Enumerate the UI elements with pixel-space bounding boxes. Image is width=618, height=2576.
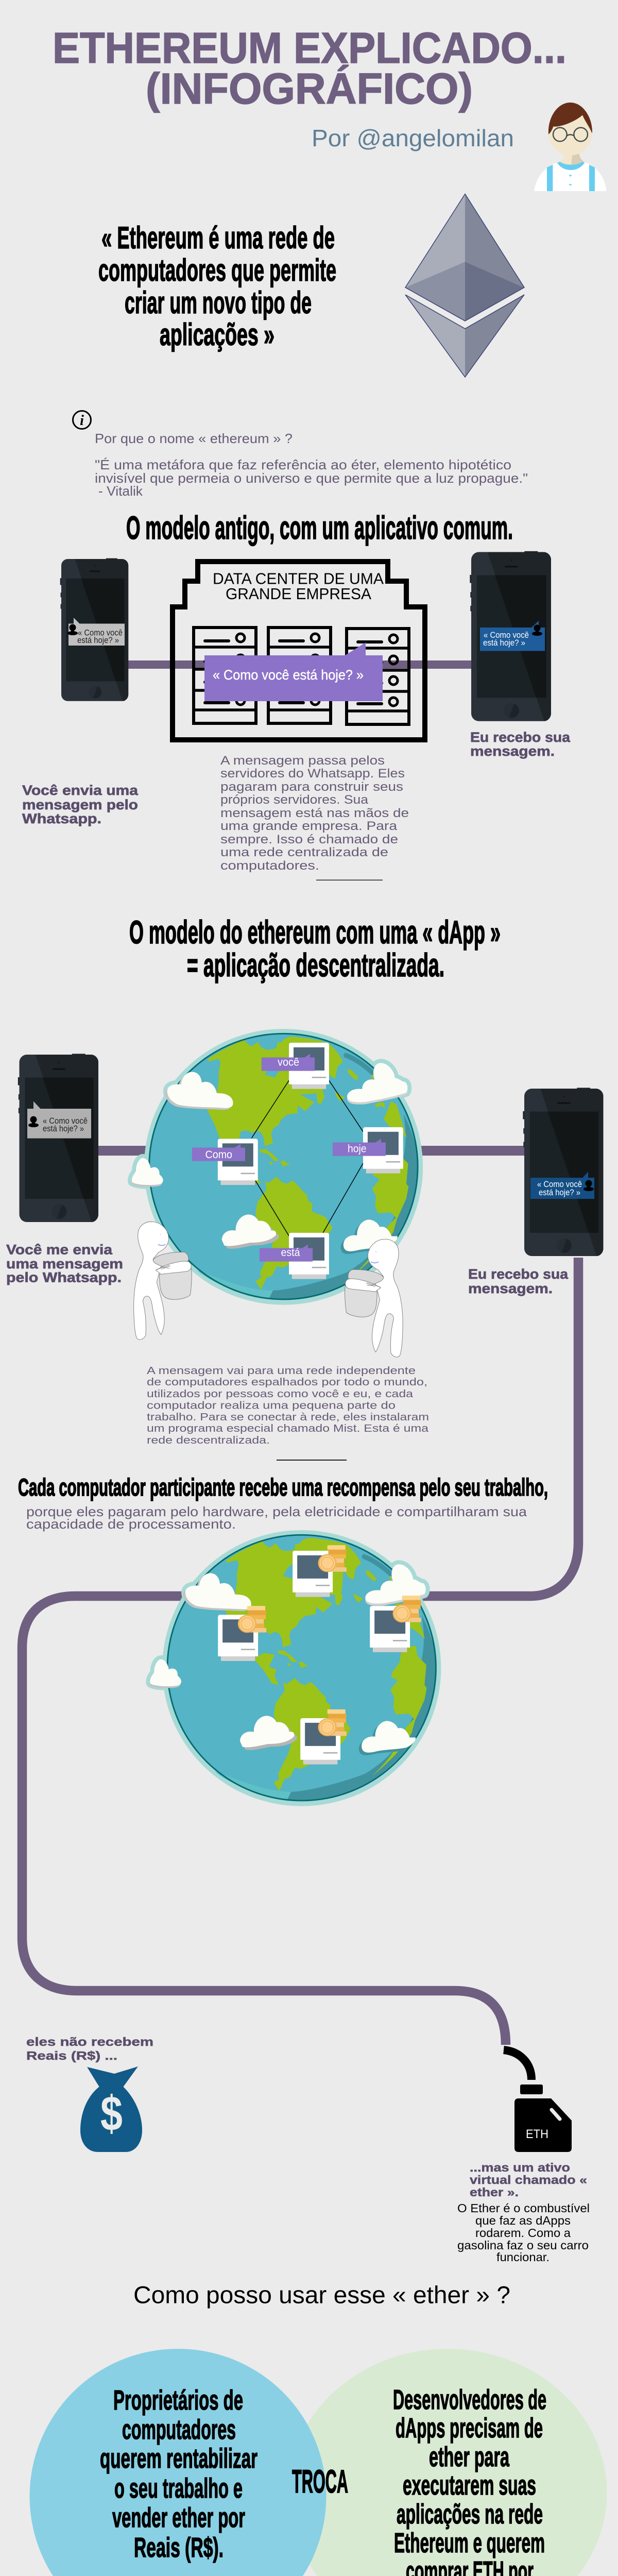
heading: ethereum model (129, 914, 501, 984)
icon: data center building: GRANDE EMPRESA (226, 585, 371, 603)
sender bubble 2 (27, 1101, 91, 1139)
illustration: globe with network (131, 1029, 423, 1305)
word labels (205, 1056, 367, 1259)
circle: developers (288, 2349, 607, 2576)
text: reward reason: porque eles pagaram pelo hardware, pela eletricidade e compartilharam sua (26, 1504, 527, 1519)
text: centralized network explanation: mensagem está nas mãos de (220, 806, 409, 820)
text: decentralized network explanation: utilizados por pessoas como você e eu, e cada (147, 1388, 414, 1400)
text: computer owners: vender ether por (112, 2502, 245, 2533)
text: why the name ethereum: Por que o nome « ethereum » ? (95, 431, 293, 446)
label: receiver: Eu recebo sua (470, 730, 571, 745)
sender bubble 2: está hoje? » (43, 1124, 84, 1133)
connector line: old model (128, 660, 471, 669)
purple message bubble (204, 642, 383, 701)
label: ether: virtual chamado « (470, 2173, 587, 2187)
icon: figures holding globe (134, 1222, 403, 1357)
icon: sender phone 2 (18, 1054, 98, 1222)
word labels: Como (205, 1149, 232, 1161)
text: centralized network explanation: servidores do Whatsapp. Eles (220, 767, 405, 781)
icon: ethereum diamond (405, 194, 524, 377)
text: computer owners: querem rentabilizar (100, 2443, 258, 2474)
label: ether (470, 2161, 587, 2199)
text: ether as fuel: funcionar. (496, 2250, 550, 2264)
text: ether as fuel: rodarem. Como a (475, 2226, 571, 2240)
text: centralized network explanation: uma rede centralizada de (220, 845, 388, 859)
label: receiver 2: Eu recebo sua (468, 1266, 569, 1282)
label: ether: ...mas um ativo (470, 2161, 570, 2174)
text: ether as fuel: gasolina faz o seu carro (457, 2239, 589, 2252)
text: ether as fuel (457, 2201, 590, 2264)
text: computer owners (100, 2385, 258, 2563)
icon: author avatar (534, 103, 607, 191)
title (53, 24, 566, 113)
label: sender: Whatsapp. (22, 811, 101, 826)
text: computer owners: o seu trabalho e (114, 2473, 243, 2504)
icon: coin stacks (238, 1545, 421, 1736)
receiver bubble 2: « Como você (537, 1180, 582, 1189)
text: centralized network explanation (220, 754, 409, 873)
text: decentralized network explanation: trabalho. Para se conectar à rede, eles instalaram (147, 1411, 429, 1423)
network links (192, 1043, 403, 1279)
label: receiver (470, 730, 571, 759)
text: computer owners: computadores (122, 2414, 236, 2445)
icon: receiver phone (470, 551, 551, 721)
label: sender 2: Você me envia (6, 1242, 113, 1257)
sender bubble 2: « Como você (43, 1116, 88, 1126)
snake connector line (22, 1258, 578, 2045)
word labels: está (281, 1247, 300, 1259)
receiver message bubble: « Como você (484, 631, 529, 640)
label: sender 2: pelo Whatsapp. (6, 1269, 122, 1285)
text: decentralized network explanation (147, 1365, 429, 1446)
label: sender (22, 783, 139, 826)
receiver bubble 2: está hoje? » (539, 1188, 580, 1197)
label: receiver 2 (468, 1266, 569, 1296)
icon: money bag (80, 2066, 142, 2152)
title: ETHEREUM EXPLICADO... (53, 24, 566, 72)
label: no reais: eles não recebem (26, 2035, 153, 2048)
icon: sender phone (60, 558, 128, 701)
quote (98, 221, 336, 352)
text: ether as fuel: que faz as dApps (475, 2214, 571, 2227)
word labels: hoje (348, 1143, 367, 1155)
text: why the name ethereum: invisível que permeia o universo e que permite que a luz propague." (95, 470, 528, 486)
text: centralized network explanation: computadores. (220, 859, 319, 873)
icon: info: i (80, 413, 84, 429)
icon: fuel can: ETH (526, 2127, 548, 2141)
word labels: você (278, 1056, 299, 1069)
text: reward reason (26, 1504, 527, 1532)
label: no reais: Reais (R$) ... (26, 2049, 117, 2062)
text: why the name ethereum (95, 431, 528, 499)
text: centralized network explanation: A mensagem passa pelos (220, 754, 385, 768)
venn diagram (30, 2349, 607, 2576)
icon: data center building: DATA CENTER DE UMA (213, 570, 384, 587)
icon: receiver phone 2 (523, 1088, 603, 1256)
icon: data center building (173, 562, 425, 740)
label: ether: ether ». (470, 2185, 519, 2199)
sender message bubble: está hoje? » (77, 636, 119, 645)
receiver message bubble (480, 621, 545, 651)
venn diagram: TROCA (292, 2464, 348, 2500)
text: developers (393, 2384, 546, 2576)
label: no reais (26, 2035, 153, 2062)
illustration: globe with coin computers (149, 1530, 441, 1806)
quote: criar um novo tipo de (125, 285, 312, 320)
label: sender 2 (6, 1242, 123, 1285)
label: sender: mensagem pelo (22, 797, 138, 812)
quote: aplicações » (160, 317, 274, 352)
text: decentralized network explanation: rede descentralizada. (147, 1434, 270, 1446)
text: computer owners: Reais (R$). (134, 2532, 224, 2563)
heading: how to use ether: Como posso usar esse « ether » ? (133, 2281, 510, 2308)
sender message bubble: « Como você (78, 629, 123, 638)
text: decentralized network explanation: A mensagem vai para uma rede independente (147, 1365, 416, 1377)
text: centralized network explanation: próprios servidores. Sua (220, 793, 369, 807)
text: centralized network explanation: pagaram para construir seus (220, 780, 403, 794)
heading: ethereum model: = aplicação descentralizada. (187, 947, 444, 984)
text: ether as fuel: O Ether é o combustível (457, 2201, 590, 2215)
sender message bubble (67, 618, 125, 646)
receiver bubble 2 (530, 1172, 594, 1199)
text: why the name ethereum: - Vitalik (98, 483, 143, 499)
quote: computadores que permite (98, 253, 336, 287)
text: developers: ether para (429, 2442, 510, 2472)
label: sender: Você envia uma (22, 783, 139, 798)
purple message bubble: « Como você está hoje? » (213, 667, 364, 683)
label: sender 2: uma mensagem (6, 1256, 123, 1272)
text: decentralized network explanation: de computadores espalhados por todo o mundo, (147, 1376, 427, 1388)
text: centralized network explanation: sempre. Isso é chamado de (220, 833, 398, 846)
text: decentralized network explanation: computador realiza uma pequena parte do (147, 1399, 396, 1412)
receiver message bubble: está hoje? » (483, 638, 525, 648)
connector lines to globe (98, 1146, 524, 1156)
icon: fuel can (504, 2050, 572, 2152)
text: computer owners: Proprietários de (113, 2385, 243, 2416)
title: (INFOGRÁFICO) (146, 64, 473, 113)
icon: info (73, 411, 91, 429)
text: reward reason: capacidade de processamento. (26, 1516, 236, 1532)
label: receiver 2: mensagem. (468, 1281, 553, 1296)
byline: Por @angelomilan (312, 125, 514, 151)
text: why the name ethereum: "É uma metáfora que faz referência ao éter, elemento hipotético (95, 457, 511, 472)
text: centralized network explanation: uma grande empresa. Para (220, 819, 398, 833)
text: decentralized network explanation: um programa especial chamado Mist. Esta é uma (147, 1422, 429, 1434)
circle: computer owners (30, 2349, 327, 2576)
label: receiver: mensagem. (470, 743, 555, 759)
icon: money bag: $ (100, 2086, 123, 2141)
quote: « Ethereum é uma rede de (101, 221, 335, 255)
